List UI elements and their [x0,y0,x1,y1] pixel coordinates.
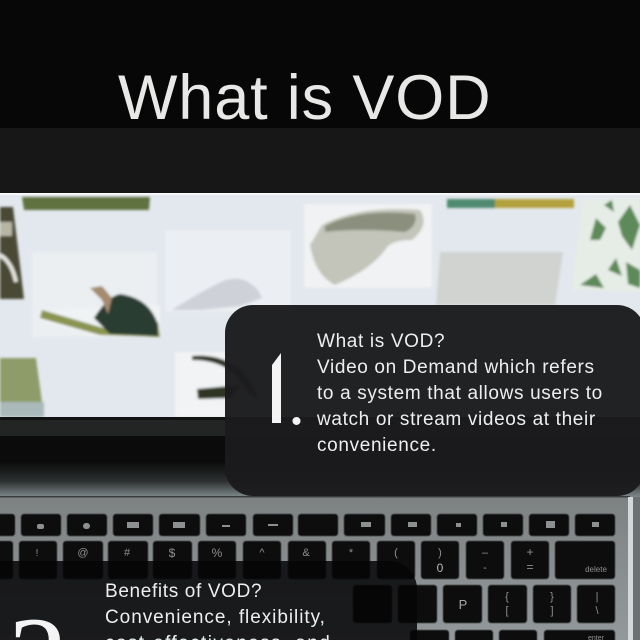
number 1 [272,353,305,439]
key legends: % [212,546,223,560]
key legends: & [302,547,310,559]
text block 1: watch or stream videos at their [317,409,596,430]
key legends: $ [169,546,176,560]
key legends: ( [394,547,398,559]
key legends: @ [77,547,89,559]
key legends: \ [595,605,599,617]
title: What is VOD [118,63,491,133]
key legends: = [526,560,534,574]
key legends: ) [438,547,442,559]
text block 2: Benefits of VOD? [105,581,262,602]
keyboard keys [0,514,615,640]
key legends: * [349,547,354,559]
key legends: ! [36,548,38,559]
key legends: + [526,545,534,559]
key legends: 0 [437,561,444,575]
key legends: - [483,562,487,574]
number 1: 1 [251,329,304,446]
key legends: ] [550,605,554,617]
key legends [36,521,607,640]
text block 1: convenience. [317,435,437,456]
keyboard deck [0,496,640,640]
key legends: P [459,597,467,612]
key legends: } [550,591,554,603]
panel: benefits of VOD [0,561,417,640]
text block 2 [105,581,331,640]
key legends: delete [585,565,607,574]
laptop screen [0,193,640,418]
laptop bezel and lip [0,417,640,497]
key legends: – [482,547,489,559]
text block 2: Convenience, flexibility, [105,607,326,628]
key legends: ^ [259,547,265,559]
key legends: | [596,591,598,603]
text block 1 [317,331,603,456]
key legends: { [505,591,509,603]
key legends: # [124,547,131,559]
key legends: [ [505,605,509,617]
text block 1: What is VOD? [317,331,445,352]
panel: what is VOD [225,305,640,496]
text block 1: to a system that allows users to [317,383,603,404]
text block 1: Video on Demand which refers [317,357,595,378]
number 1: . [288,363,305,439]
